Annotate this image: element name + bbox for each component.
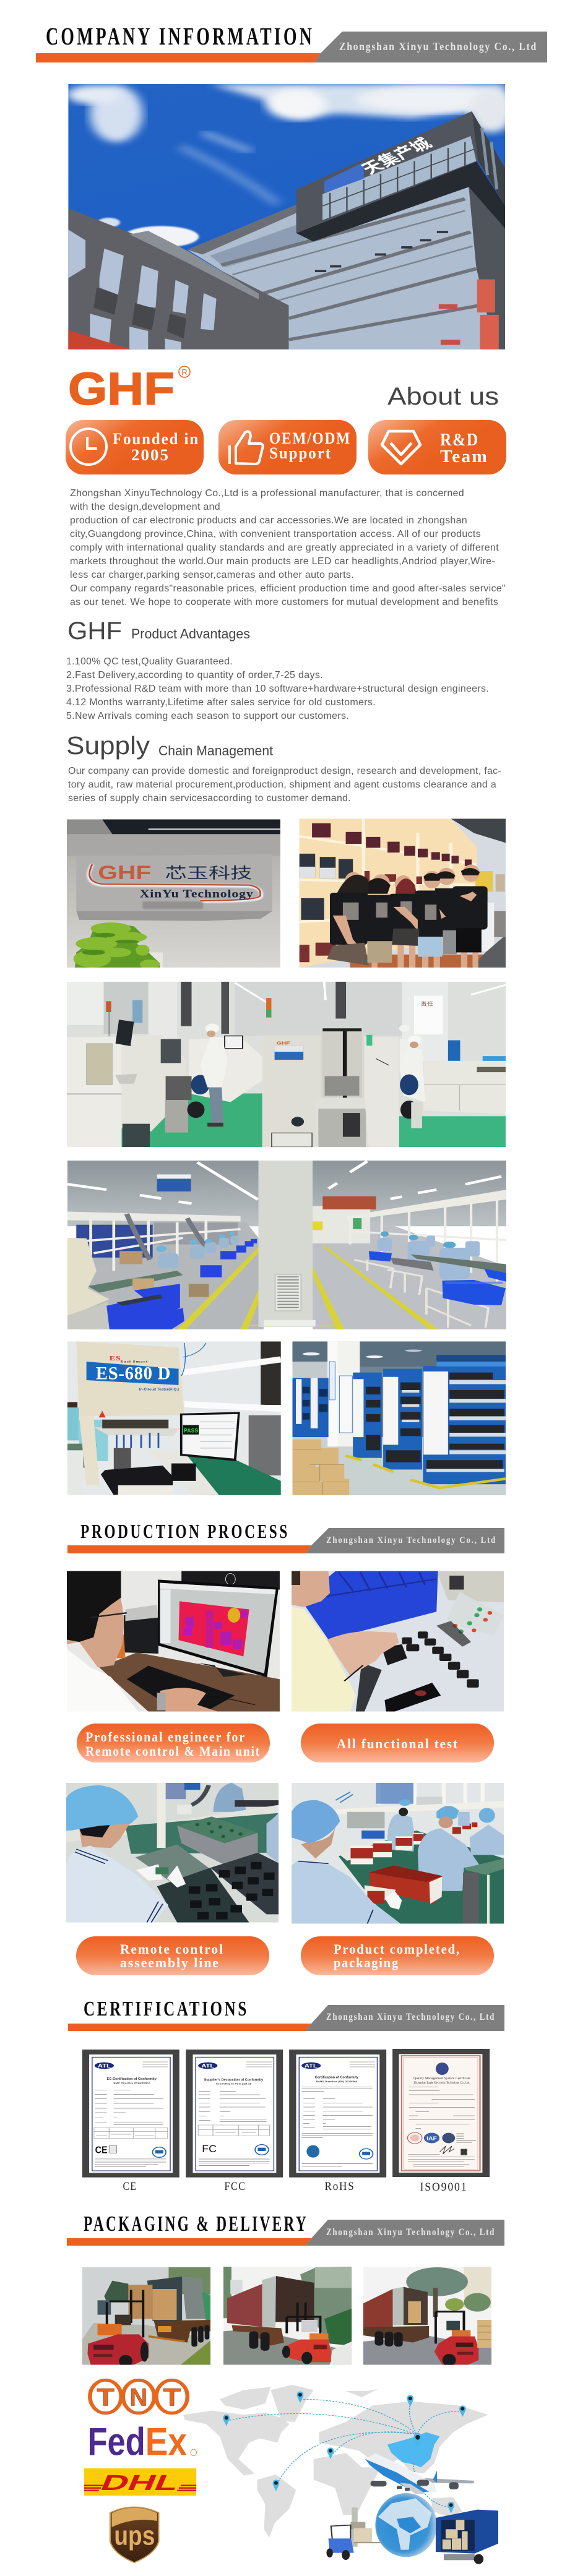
registered mark: R [181, 367, 188, 377]
icon: diamond check [382, 431, 420, 464]
photo: assembly workshop [67, 1161, 506, 1329]
photo: GHF company sign [67, 819, 280, 968]
icon: clock [71, 429, 106, 465]
logo: UPS [110, 2507, 158, 2562]
heading: GHF product advantages [67, 617, 250, 645]
badge: founded in 2005: Founded in [113, 430, 199, 448]
text block: company description [69, 488, 506, 608]
section title: PACKAGING & DELIVERY [84, 2212, 308, 2236]
logo: TNT: T [97, 2383, 115, 2411]
registered mark [179, 366, 190, 377]
logo: FedEx: Fed [87, 2419, 145, 2463]
text block: company description: as our tenet. We hope to cooperate with more customers for mutual development and benefits [70, 597, 498, 608]
section title: COMPANY INFORMATION [46, 22, 314, 50]
certificate: CE [82, 2050, 179, 2178]
caption pill: all functional test [301, 1724, 494, 1762]
text block: supply chain: series of supply chain servicesaccording to customer demand. [68, 793, 351, 804]
badge: founded in 2005: 2005 [131, 446, 170, 464]
text block: advantages list: 1.100% QC test,Quality Guaranteed. [66, 656, 233, 667]
heading: supply chain management: Supply [66, 731, 150, 760]
photos: production process [66, 1571, 504, 2020]
certificate: CE: CE [95, 2144, 108, 2155]
certificate: FCC: Supplier's Declaration of Conformity [204, 2078, 263, 2082]
grey company band [306, 1528, 504, 1553]
photo: functional testing of remotes [292, 1571, 504, 1712]
company name: Zhongshan Xinyu Technology Co., Ltd [326, 2227, 495, 2238]
photos: assembly line and warehouse [67, 1161, 506, 1495]
world map with routes [183, 2385, 488, 2538]
heading: supply chain management [66, 731, 273, 760]
text block: advantages list: 4.12 Months warranty,Lifetime after sales service for old customers. [66, 697, 376, 708]
certificates row [82, 2049, 490, 2178]
photo: ICT tester: In-Circuit Tester(H.Q.) [139, 1388, 179, 1391]
text block: company description: Our company regards"reasonable prices, efficient production time and good after-sales service" [70, 583, 506, 594]
company name: Zhongshan Xinyu Technology Co., Ltd [339, 40, 537, 53]
logo: FedEx: Ex [145, 2419, 187, 2463]
photo: forklift loading container 3 [363, 2267, 491, 2365]
photo: SMT production line: GHF [277, 1041, 290, 1045]
caption pill: remote control assembly line: asseembly line [120, 1955, 220, 1970]
grey company band [306, 2220, 504, 2246]
orange rule [36, 53, 321, 62]
photo: ICT tester: ES-680 D [96, 1363, 171, 1383]
header: production process [67, 1520, 504, 1553]
logo: TNT [90, 2380, 188, 2413]
text block: supply chain: Our company can provide domestic and foreignproduct design, research and development, fac- [68, 766, 501, 776]
photo: forklift loading container 2 [223, 2267, 352, 2365]
photo: ICT tester: ES [110, 1355, 121, 1362]
badge: R&D team [368, 420, 506, 474]
header: packaging and delivery [67, 2212, 504, 2246]
caption pill: product completed, packaging: Product completed, [334, 1941, 460, 1957]
text block: advantages list: 2.Fast Delivery,according to quantity of order,7-25 days. [66, 670, 323, 680]
logo: TNT: N [130, 2383, 147, 2411]
text block: company description: less car charger,parking sensor,cameras and other auto parts. [70, 570, 354, 580]
photo: remote control assembly [66, 1783, 279, 1923]
photo: SMT production line [67, 981, 506, 1147]
certificate: CE: EC-Certification of Conformity [106, 2077, 157, 2081]
photo: ICT tester: PASS [184, 1428, 198, 1434]
text block: company description: city,Guangdong province,China, with convenient transportation access. All of our products [70, 529, 481, 539]
illustration: airplane [365, 2454, 475, 2494]
header: certifications [68, 1998, 504, 2031]
caption pill: remote control assembly line: Remote control [120, 1941, 224, 1957]
certificate: ISO9001 [392, 2049, 490, 2177]
badge: OEM/ODM support [218, 420, 357, 474]
photo: forklift loading container 1 [82, 2267, 210, 2365]
text block: advantages list: 5.New Arrivals coming each season to support our customers. [66, 711, 349, 721]
certificate: FCC: According to FCC part 15 [216, 2082, 252, 2085]
text block: advantages list: 3.Professional R&D team with more than 10 software+hardware+structural design engineers. [66, 684, 489, 694]
header: company information [36, 22, 547, 62]
photos: office and SMT workshop [67, 818, 506, 1147]
certificate labels: ISO9001 [420, 2181, 468, 2194]
logo: DHL: DHL [97, 2470, 184, 2495]
grey company band [314, 32, 547, 62]
illustration: container truck [436, 2510, 498, 2564]
illustration: forklift [326, 2507, 381, 2560]
certificate labels [123, 2180, 468, 2194]
badge: founded in 2005 [66, 420, 204, 474]
photo: company building: 天集产城 [358, 135, 436, 178]
certificate: CE: ATL [98, 2063, 111, 2069]
brand logo: GHF: GHF [68, 363, 175, 414]
certificate: ISO9001: IAF [426, 2136, 437, 2141]
badge: R&D team: Team [440, 447, 488, 466]
logo: UPS: ups [114, 2520, 155, 2551]
certificate: RoHS: RoHS Directive (EU) 2015/863 [316, 2080, 358, 2083]
illustration: globe [375, 2493, 437, 2557]
text block: supply chain: tory audit, raw material procurement,production, shipment and agent customs clearance and a [68, 779, 496, 790]
certificate labels: CE [123, 2180, 137, 2193]
text block: company description: comply with international quality standards and are greatly appreciated in a variety of different [70, 543, 499, 553]
icon: thumbs up [230, 431, 263, 464]
heading: GHF product advantages: GHF [67, 617, 122, 645]
company name: Zhongshan Xinyu Technology Co., Ltd [326, 1535, 496, 1545]
caption pill: professional engineer: Professional engineer for [85, 1729, 246, 1745]
photo: GHF company sign: XinYu Technology [140, 888, 254, 900]
certificate labels: RoHS [324, 2180, 355, 2193]
section title: PRODUCTION PROCESS [80, 1520, 290, 1542]
certificate: FCC: ATL [201, 2063, 214, 2069]
text block: company description: with the design,development and [69, 502, 220, 512]
caption pill: professional engineer [77, 1724, 270, 1762]
logo: TNT: T [163, 2383, 181, 2411]
photo: product packaging line [292, 1783, 504, 1924]
logo: DHL [84, 2468, 196, 2496]
certificate: CE: EMC Directive 2014/30/EU [113, 2082, 150, 2084]
certificate: RoHS: Certification of Conformity [315, 2076, 358, 2079]
badge: R&D team: R&D [440, 431, 479, 450]
caption pill: all functional test: All functional test [337, 1736, 459, 1751]
heading: about us: About us [387, 383, 499, 410]
packaging photos, couriers and world map [82, 2267, 498, 2564]
caption pill: professional engineer: Remote control & Main unit [85, 1743, 261, 1759]
heading: GHF product advantages: Product Advantages [131, 626, 250, 642]
text block: supply chain [68, 766, 501, 804]
orange rule [68, 2024, 311, 2031]
photo: company building [68, 84, 505, 350]
text block: advantages list [66, 656, 489, 721]
certificate: RoHS [289, 2050, 386, 2178]
section title: CERTIFICATIONS [84, 1998, 249, 2020]
certificate labels: FCC [224, 2180, 246, 2193]
caption pill: product completed, packaging: packaging [334, 1955, 399, 1970]
grey company band [306, 2005, 504, 2031]
certificate: FCC: FC [202, 2144, 217, 2155]
text block: company description: markets throughout the world.Our main products are LED car headlights,Andriod player,Wire- [70, 556, 495, 567]
orange rule [67, 1545, 311, 1553]
caption pill: remote control assembly line [76, 1936, 269, 1975]
photo: SMT production line: 责任 [421, 1001, 433, 1007]
certificate: ISO9001: Zhongshan Eagle Electronic Technology Co., Ltd. [413, 2082, 470, 2085]
certificate: RoHS: ATL [305, 2063, 318, 2069]
badge: OEM/ODM support: OEM/ODM [269, 429, 351, 447]
heading: supply chain management: Chain Management [158, 743, 273, 758]
photo: warehouse racks [292, 1341, 506, 1495]
photo: ICT tester: Easi Smart [121, 1360, 148, 1363]
caption pill: product completed, packaging [301, 1936, 494, 1975]
photo: team in showroom [300, 818, 506, 968]
badge: OEM/ODM support: Support [269, 444, 332, 462]
photo: GHF company sign: 芯玉科技 [165, 865, 252, 882]
company name: Zhongshan Xinyu Technology Co., Ltd [326, 2012, 495, 2022]
photo: engineer at PCB design screen [67, 1571, 280, 1712]
photo: GHF company sign: GHF [98, 861, 151, 883]
text block: company description: Zhongshan XinyuTechnology Co.,Ltd is a professional manufacturer, that is concerned [70, 488, 464, 499]
certificate: FCC [186, 2050, 283, 2178]
orange rule [67, 2238, 311, 2246]
China highlighted [387, 2432, 439, 2467]
text block: company description: production of car electronic products and car accessories.We are located in zhongshan [70, 515, 467, 526]
certificate: ISO9001: Quality Management System Certificate [413, 2077, 470, 2080]
photo: ICT tester [67, 1341, 281, 1495]
